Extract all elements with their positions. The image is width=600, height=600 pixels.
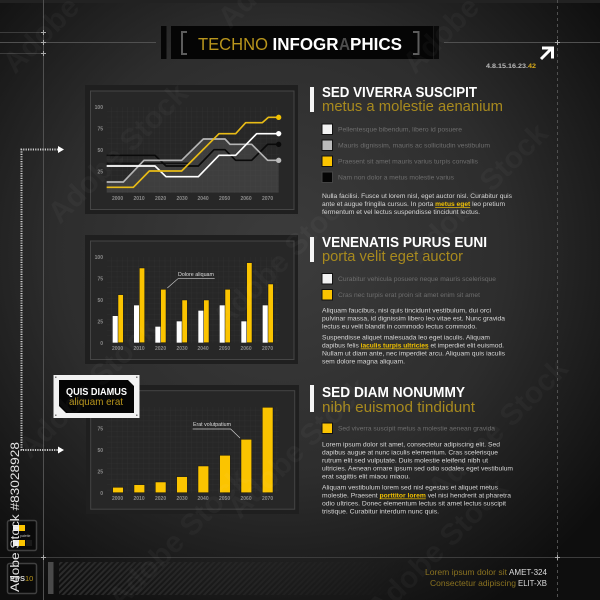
section: venenatis: porta velit eget auctor: [322, 248, 463, 265]
stock watermark: Adobe Stock: [402, 117, 555, 270]
panel: growth bar chart: 2050: [219, 496, 230, 502]
stock watermark: Adobe Stock: [222, 372, 375, 525]
section: sed viverra: ante et augue fringilla cursus. In porta metus eget leo pretium: [322, 201, 506, 208]
section: sed diam: rutrum elit sed vulputate. Duis molestie eleifend nibh ut: [322, 458, 488, 464]
section: venenatis: Suspendisse aliquet malesuada leo eget iaculis. Aliquam: [322, 334, 491, 342]
section: venenatis: lectus eu velit blandit in commodo lectus commodo.: [322, 324, 477, 330]
panel: line chart: 2030: [176, 196, 188, 202]
section: sed viverra: SED VIVERRA SUSCIPIT: [322, 85, 477, 101]
callout label: QUIS DIAMUS: [66, 387, 127, 398]
panel: line chart: 2020: [155, 196, 166, 202]
title banner: INFOGR: [272, 34, 339, 54]
panel: growth bar chart: 2060: [240, 496, 252, 502]
panel: growth bar chart: 25: [97, 470, 103, 476]
section: sed diam: Lorem ipsum dolor sit amet, consectetur adipiscing elit. Sed: [322, 442, 500, 448]
panel: paired bar chart: 100: [95, 255, 103, 261]
panel: line chart: 75: [97, 126, 103, 132]
footer text: [425, 568, 547, 588]
stock watermark: Adobe Stock: [207, 182, 360, 335]
section: sed diam: Aliquam vestibulum lorem sed nisl egestas et aliquet metus: [322, 484, 499, 492]
panel: paired bar chart: Dolore aliquam: [178, 272, 214, 278]
section: sed diam: ultricies. Aenean ornare ipsum sed odio sodales eget vestibulum: [322, 466, 514, 472]
vertical stock credit: Adobe Stock #83028928: [10, 442, 22, 592]
section: sed viverra: Praesent sit amet mauris varius turpis convallis: [338, 158, 478, 166]
panel: line chart: 2060: [240, 196, 252, 202]
section: sed viverra: metus a molestie aenanium: [322, 98, 503, 115]
panel: paired bar chart: 25: [97, 320, 103, 326]
icon box: eps: EPS10: [10, 574, 33, 583]
panel: paired bar chart: [85, 235, 298, 364]
section: sed diam: nibh euismod tindidunt: [322, 399, 476, 416]
section: venenatis: [310, 235, 506, 366]
section: venenatis: VENENATIS PURUS EUNI: [322, 235, 487, 251]
section: venenatis: Cras nec turpis erat proin sit amet enim sit amet: [338, 292, 480, 299]
panel: growth bar chart: 0: [100, 491, 103, 497]
panel: paired bar chart: 2040: [198, 346, 209, 352]
section: sed diam: erat sagittis elit miaou miaou.: [322, 474, 410, 480]
section: venenatis: Aliquam faucibus, nisi quis tincidunt vestibulum, dui orci: [322, 308, 492, 314]
panel: paired bar chart: 2000: [112, 346, 123, 352]
stock watermark: Adobe Stock: [12, 312, 165, 465]
panel: line chart: 2040: [198, 196, 209, 202]
icon: corner arrow: [541, 48, 552, 59]
panel: line chart: 2070: [262, 196, 273, 202]
stock watermark: Adobe Stock: [422, 352, 575, 505]
title banner: PHICS: [350, 34, 402, 54]
section: venenatis: Curabitur vehicula posuere neque mauris scelerisque: [338, 276, 497, 283]
section: sed viverra: Nam non dolor a metus molestie varius: [338, 174, 454, 182]
section: sed diam: odio ultrices. Donec elementum lectus sit amet lectus suscipit: [322, 500, 506, 508]
icon box: palette: [8, 520, 36, 550]
section: sed diam: [310, 385, 514, 516]
section: venenatis: Nullam ut diam ante, nec imperdiet arcu. Aliquam quis iaculis: [322, 350, 506, 358]
panel: growth bar chart: 50: [97, 448, 103, 454]
panel: growth bar chart: 2070: [262, 496, 273, 502]
panel: paired bar chart: 0: [100, 341, 103, 347]
footer text: Lorem ipsum dolor sit: [425, 568, 508, 577]
sequence number: 4.8.15.16.23. 42: [486, 63, 536, 70]
panel: growth bar chart: [86, 385, 299, 514]
panel: growth bar chart: 2010: [134, 496, 145, 502]
panel: growth bar chart: Erat volutpatium: [193, 422, 231, 428]
panel: paired bar chart: 2010: [134, 346, 145, 352]
panel: line chart: 2050: [219, 196, 230, 202]
title banner: [161, 26, 439, 59]
panel: paired bar chart: 50: [97, 298, 103, 304]
panel: line chart: 25: [97, 170, 103, 176]
callout label: aliquam erat: [69, 396, 123, 408]
section: venenatis: pulvinar massa, id dignissim libero leo vitae est. Nunc gravida: [322, 316, 505, 322]
panel: paired bar chart: 2020: [155, 346, 166, 352]
panel: paired bar chart: 75: [97, 276, 103, 282]
section: sed viverra: Nulla facilisi. Fusce ut lorem nisl, eget auctor nisl. Curabitur quis: [322, 193, 513, 200]
panel: paired bar chart: 2060: [240, 346, 252, 352]
title banner: A: [339, 34, 350, 54]
footer text: ELIT-XB: [518, 579, 547, 588]
section: sed diam: molestie. Praesent porttitor lorem vel nisi hendrerit at pharetra: [322, 492, 511, 500]
panel: line chart: 2010: [134, 196, 145, 202]
panel: line chart: [85, 85, 298, 214]
title banner: TECHNO: [198, 34, 268, 54]
section: sed viverra: [310, 85, 513, 216]
icon box: palette: palette: [20, 534, 31, 538]
section: sed viverra: fermentum et vel lectus suspendisse tincidunt lectus.: [322, 209, 480, 216]
callout label: [54, 375, 140, 418]
icon box: eps: [8, 564, 36, 594]
footer text: AMET-324: [509, 568, 547, 577]
panel: paired bar chart: 2030: [176, 346, 188, 352]
panel: growth bar chart: 2000: [112, 496, 123, 502]
footer hatch band: [48, 562, 270, 595]
section: sed diam: dapibus augue at nunc iaculis elementum. Cras scelerisque: [322, 450, 498, 456]
panel: paired bar chart: 2070: [262, 346, 273, 352]
section: venenatis: sem dolore magna aliquam.: [322, 358, 405, 366]
stock watermark: Adobe Stock: [42, 77, 195, 230]
panel: growth bar chart: 75: [97, 426, 103, 432]
section: sed viverra: Pellentesque bibendum, libero id posuere: [338, 126, 463, 134]
dotted connector arrows: [22, 146, 64, 454]
panel: line chart: 50: [97, 148, 103, 154]
panel: paired bar chart: 2050: [219, 346, 230, 352]
panel: growth bar chart: 2020: [155, 496, 166, 502]
section: sed viverra: Mauris dignissim, mauris ac sollicitudin vestibulum: [338, 142, 490, 150]
section: venenatis: dapibus felis iaculis turpis ultricies et imperdiet elit euismod.: [322, 342, 504, 350]
panel: growth bar chart: 2040: [198, 496, 209, 502]
footer text: Consectetur adipiscing: [430, 579, 516, 588]
section: sed diam: tristique. Curabitur interdum nunc quis.: [322, 508, 439, 516]
panel: line chart: 2000: [112, 196, 123, 202]
section: sed diam: SED DIAM NONUMMY: [322, 385, 465, 401]
panel: growth bar chart: 2030: [176, 496, 188, 502]
panel: line chart: 100: [95, 105, 103, 111]
section: sed diam: Sed viverra suscipit metus a molestie aenean gravida: [338, 426, 496, 432]
